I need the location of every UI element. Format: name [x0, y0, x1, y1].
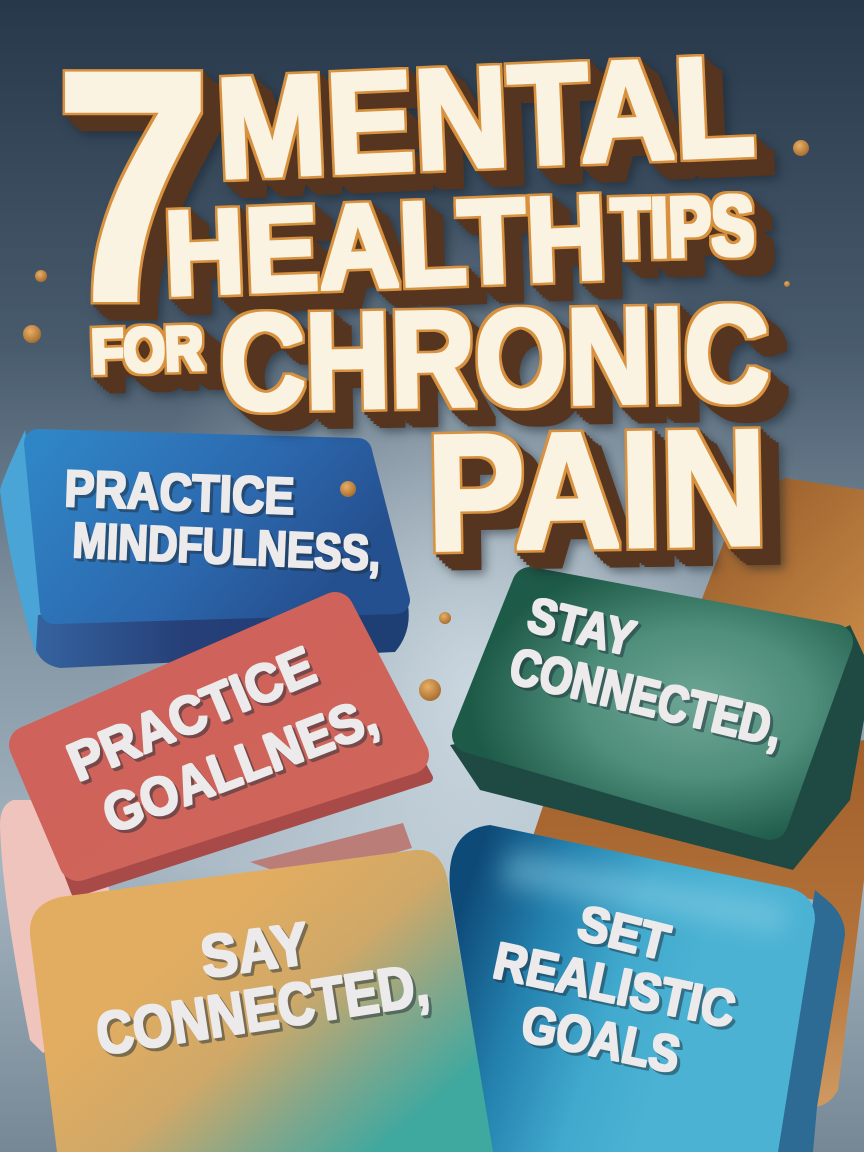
title word mental: MENTAL: [213, 27, 758, 209]
text: stay connected: [504, 586, 788, 759]
panel: blue block practice mindfulness: [0, 430, 409, 668]
panel: yellow-green block say connected: [30, 850, 494, 1152]
panel: red block practice goallnes: [22, 606, 428, 892]
text: stay connected: CONNECTED,: [504, 637, 788, 759]
decorative beads: [23, 140, 809, 701]
panel: orange block behind: [530, 478, 864, 1107]
text: set realistic goals: [489, 894, 740, 1085]
title: [55, 2, 770, 585]
text: say connected: CONNECTED,: [92, 950, 433, 1068]
title word chronic: CHRONIC: [219, 277, 770, 440]
text: practice goallnes: PRACTICE: [59, 635, 324, 793]
title word health: HEALTH: [162, 170, 609, 321]
panel: pink block behind: [0, 800, 412, 1053]
text: practice mindfulness: [64, 460, 382, 581]
text: set realistic goals: SET: [572, 894, 675, 971]
title word pain: PAIN: [425, 395, 769, 585]
text: practice goallnes: GOALLNES,: [95, 686, 385, 845]
panel: blue block set realistic goals: [450, 825, 845, 1152]
text: say connected: SAY: [196, 909, 313, 991]
icon: bead on blue block: [340, 481, 356, 497]
text: practice mindfulness: MINDFULNESS,: [72, 512, 382, 581]
panel: green block stay connected: [450, 585, 864, 870]
text: set realistic goals: REALISTIC: [489, 932, 740, 1040]
text: set realistic goals: GOALS: [517, 995, 685, 1085]
text: practice mindfulness: PRACTICE: [64, 460, 295, 526]
title word tips: TIPS: [610, 178, 755, 277]
text: practice goallnes: [59, 635, 385, 845]
title word for: FOR: [90, 314, 204, 387]
title number 7: 7: [55, 2, 211, 370]
text: stay connected: STAY: [522, 586, 641, 667]
